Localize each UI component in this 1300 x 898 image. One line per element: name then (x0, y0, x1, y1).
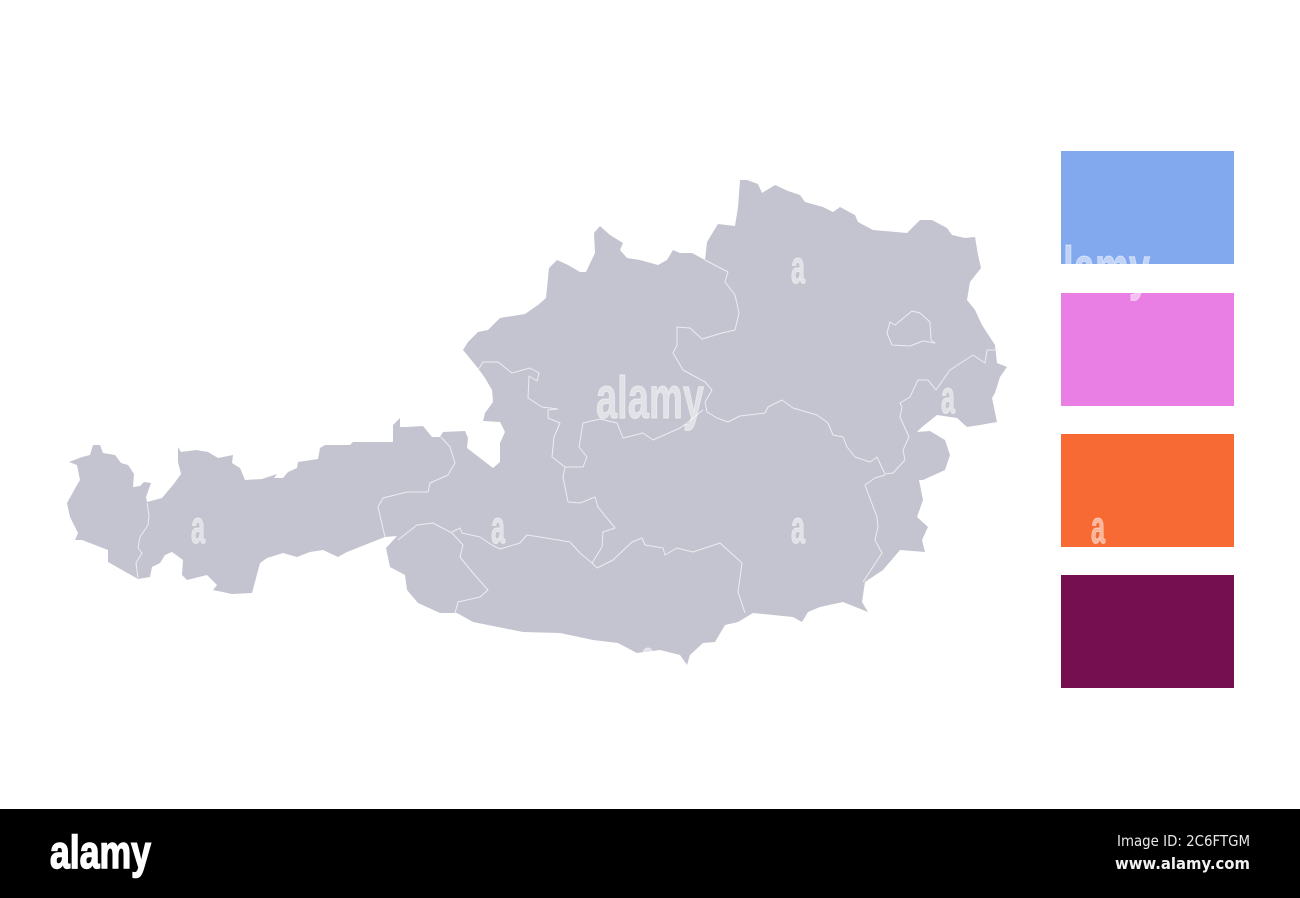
footer logo: alamy (50, 826, 151, 878)
centre watermark: alamy (596, 365, 704, 431)
Vienna (887, 311, 935, 346)
watermarks: a (641, 631, 655, 683)
watermarks (191, 235, 1150, 683)
swatch: pink (1061, 293, 1234, 406)
swatch: orange (1061, 434, 1234, 547)
image id: Image ID: 2C6FTGM (1117, 832, 1250, 850)
watermarks: a (1091, 501, 1105, 553)
footer bar (0, 809, 1300, 898)
legend watermark: alamy (1042, 235, 1150, 301)
swatch: purple (1061, 575, 1234, 688)
watermarks: a (191, 501, 205, 553)
watermarks: a (491, 501, 505, 553)
watermarks: a (941, 371, 955, 423)
country silhouette (67, 180, 1007, 665)
legend colour swatches (1061, 151, 1234, 688)
watermarks: a (791, 501, 805, 553)
state borders (136, 260, 997, 613)
website: www.alamy.com (1115, 854, 1250, 873)
map of Austria (67, 180, 1007, 665)
watermarks: a (791, 241, 805, 293)
swatch: blue (1061, 151, 1234, 264)
